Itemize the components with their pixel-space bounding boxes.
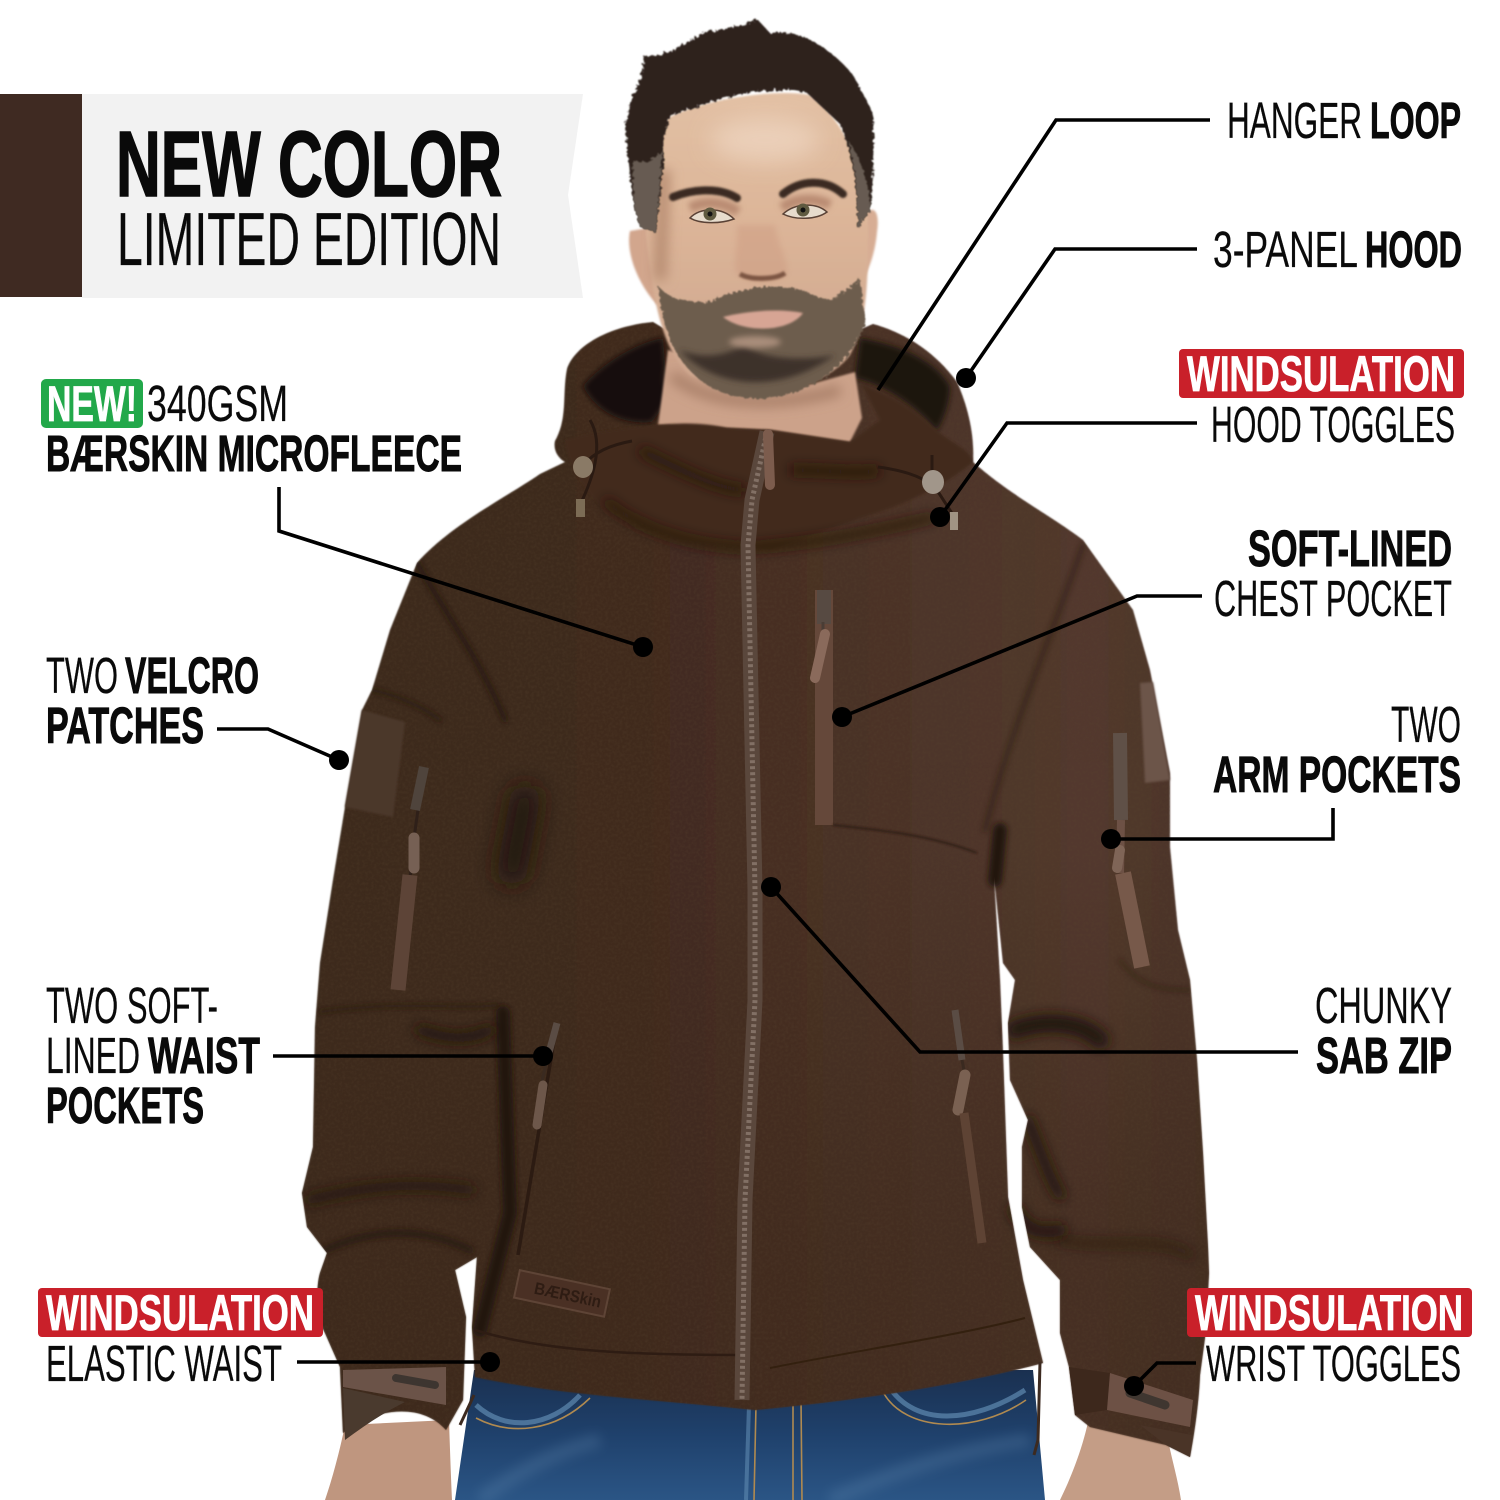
hood toggles — [573, 420, 958, 530]
nose shadow — [740, 273, 785, 278]
face shadow left — [660, 170, 664, 280]
right arm pocket zip — [1117, 733, 1142, 967]
callout: waist pockets: WAIST — [148, 1027, 260, 1084]
right strap slot — [1130, 1393, 1165, 1405]
right cuff strap — [1107, 1373, 1193, 1427]
callout: chest pocket — [832, 520, 1452, 727]
banner colour swatch — [0, 94, 82, 297]
callout: microfleece: 340GSM — [147, 375, 288, 432]
logo patch: BÆRSkin — [532, 1279, 603, 1312]
right toggle cord — [1034, 1362, 1040, 1455]
callout: velcro patches: PATCHES — [46, 697, 204, 754]
jacket lower shading — [302, 322, 1209, 1457]
pouch seam — [833, 825, 977, 853]
callout: elastic waist — [38, 1285, 500, 1392]
callout: hanger loop — [878, 92, 1461, 390]
callout: waist pockets: LINED — [46, 1027, 140, 1084]
subtitle: LIMITED EDITION — [117, 197, 501, 281]
callout: 3-panel hood: 3-PANEL — [1213, 221, 1358, 278]
callout: waist pockets: POCKETS — [46, 1077, 204, 1134]
hood collar fold shadow — [640, 450, 880, 490]
face — [646, 93, 868, 390]
centre zip — [742, 432, 770, 1400]
callout: hanger loop: HANGER — [1227, 92, 1362, 149]
left hand — [325, 1420, 452, 1500]
left strap slot — [396, 1378, 435, 1385]
callout: waist pockets — [46, 977, 553, 1134]
eyes — [690, 204, 827, 223]
beard — [658, 279, 865, 398]
title: NEW COLOR — [116, 112, 502, 216]
jeans — [455, 1370, 1045, 1500]
photo: man wearing brown fleece jacket — [295, 19, 1220, 1500]
beard dark chin — [680, 345, 835, 382]
left toggle cord — [460, 1395, 474, 1425]
eye socket shadows — [690, 200, 830, 212]
right hand — [1060, 1422, 1181, 1500]
nose — [735, 225, 787, 282]
hair — [625, 19, 874, 232]
right cuff knit — [1140, 1425, 1192, 1457]
chin patch — [729, 336, 781, 348]
callout: 3-panel hood — [956, 221, 1462, 388]
fleece texture, folds and shadows — [295, 310, 1220, 1460]
left arm pocket zip — [398, 767, 424, 990]
velcro patch right — [1140, 682, 1170, 783]
callout: wrist toggles — [1124, 1285, 1472, 1396]
left cuff knit — [343, 1388, 405, 1440]
jacket silhouette — [302, 322, 1209, 1457]
eyebrows — [673, 183, 843, 198]
callout: hood toggles — [930, 346, 1464, 527]
chest pocket zip — [815, 590, 833, 825]
right cuff tab — [1069, 1367, 1110, 1415]
neck shadow under beard — [672, 375, 840, 402]
callout: elastic waist: ELASTIC WAIST — [46, 1335, 282, 1392]
callout: elastic waist: WINDSULATION — [46, 1285, 314, 1341]
banner background — [82, 94, 583, 298]
callout: velcro patches: VELCRO — [125, 647, 259, 704]
callout: microfleece: BÆRSKIN MICROFLEECE — [46, 425, 462, 482]
left cuff strap — [343, 1367, 446, 1405]
callout: velcro patches — [46, 647, 349, 770]
hood interior right — [855, 338, 950, 431]
hem seam — [476, 1317, 1025, 1369]
neck — [658, 350, 862, 442]
ear right — [860, 210, 878, 285]
hood yoke shadow — [605, 500, 935, 548]
velcro patch left — [345, 710, 405, 817]
hood collar folds — [565, 385, 973, 550]
jeans pocket stitching and fly — [476, 1388, 1030, 1500]
callout: velcro patches: TWO — [46, 647, 118, 704]
forehead highlight — [710, 118, 820, 162]
waist pockets — [518, 1010, 982, 1255]
logo patch — [514, 1270, 610, 1317]
hood interior left — [583, 338, 668, 422]
callout: microfleece — [41, 375, 653, 657]
callout: sab zip — [761, 877, 1452, 1084]
ear left — [629, 228, 668, 305]
callout: arm pockets — [1101, 696, 1461, 849]
callout: microfleece: NEW! — [47, 376, 137, 432]
banner — [0, 94, 583, 298]
lips — [723, 310, 803, 329]
callout: waist pockets: TWO SOFT- — [46, 977, 218, 1034]
temple grey fade — [633, 140, 870, 232]
